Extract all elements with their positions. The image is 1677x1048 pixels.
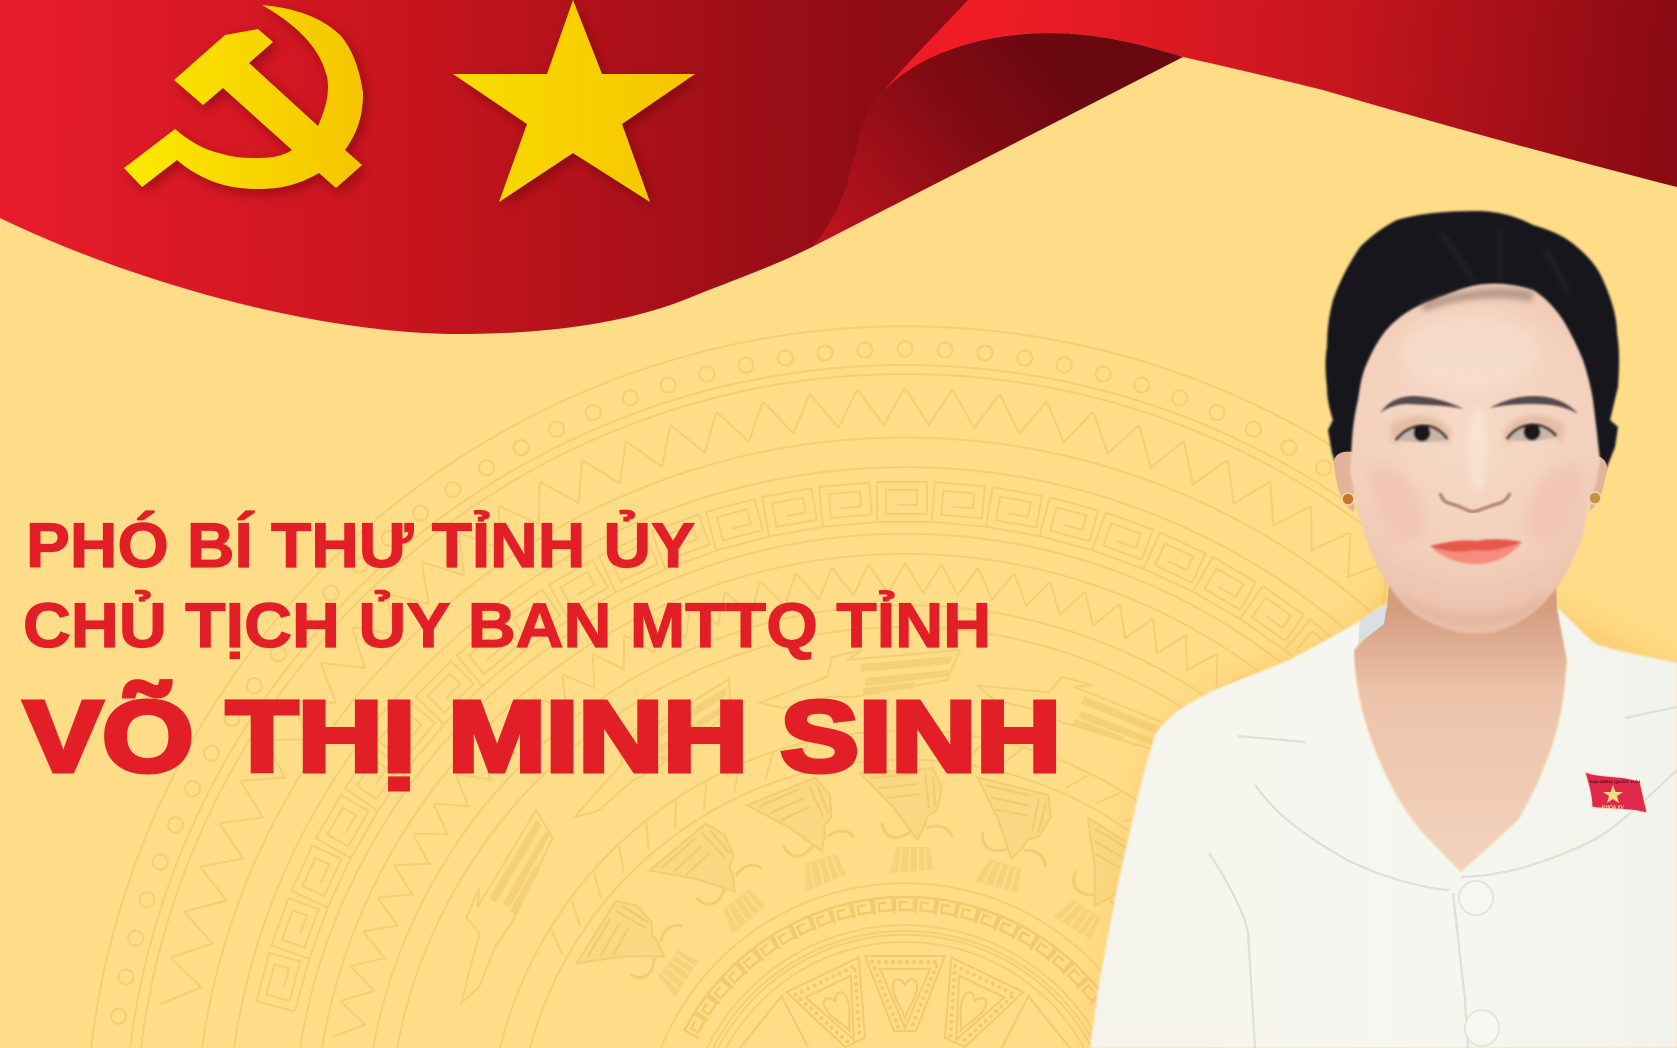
flag: left panel: [0, 0, 975, 334]
jacket button 2: [1465, 1010, 1499, 1046]
national assembly badge: [1585, 772, 1647, 813]
nose: [1440, 493, 1510, 512]
neck: [1354, 560, 1567, 872]
icon: yellow star: [453, 0, 695, 202]
jacket button 1: [1459, 881, 1493, 915]
hair: [1326, 211, 1619, 477]
hair highlights: [1440, 228, 1568, 292]
eye socket shading: [1390, 415, 1565, 445]
subtitle line 1: PHÓ BÍ THƯ TỈNH ỦY: [26, 510, 695, 581]
red flag banner: [0, 0, 1677, 334]
nose bridge highlight: [1469, 408, 1487, 492]
ears: [1334, 452, 1607, 512]
thin hairline haze: [1420, 288, 1535, 312]
eye left: [1396, 424, 1447, 442]
inner collar shadow: [1358, 604, 1387, 644]
mouth: [1430, 539, 1522, 564]
forehead highlight: [1400, 316, 1540, 388]
watermark: bronze drum pattern: [91, 325, 1674, 1048]
eye right: [1507, 424, 1556, 441]
title text block: [23, 510, 1061, 793]
eyebrow left: [1380, 396, 1464, 413]
jacket seams and collar: [1209, 707, 1677, 1048]
badge top text: ĐẠI BIỂU QUỐC HỘI: [1590, 779, 1640, 784]
flag: dark fold: [812, 33, 1183, 247]
earring left: [1342, 493, 1354, 505]
face: [1350, 284, 1600, 634]
icon: hammer and sickle: [124, 5, 363, 189]
portrait glow: [1090, 560, 1677, 1048]
eyebrow right: [1490, 396, 1578, 414]
badge bottom text: KHÓA XV: [1602, 803, 1625, 811]
badge star: [1603, 785, 1623, 803]
jacket: [1090, 603, 1677, 1048]
chin shading: [1400, 590, 1548, 626]
portrait photo: [1090, 211, 1677, 1048]
earring right: [1589, 492, 1601, 504]
flag: right ribbon: [874, 0, 1677, 187]
blush: [1368, 466, 1585, 541]
subtitle line 2: CHỦ TỊCH ỦY BAN MTTQ TỈNH: [23, 590, 991, 661]
name: VÕ THỊ MINH SINH: [24, 681, 1061, 793]
